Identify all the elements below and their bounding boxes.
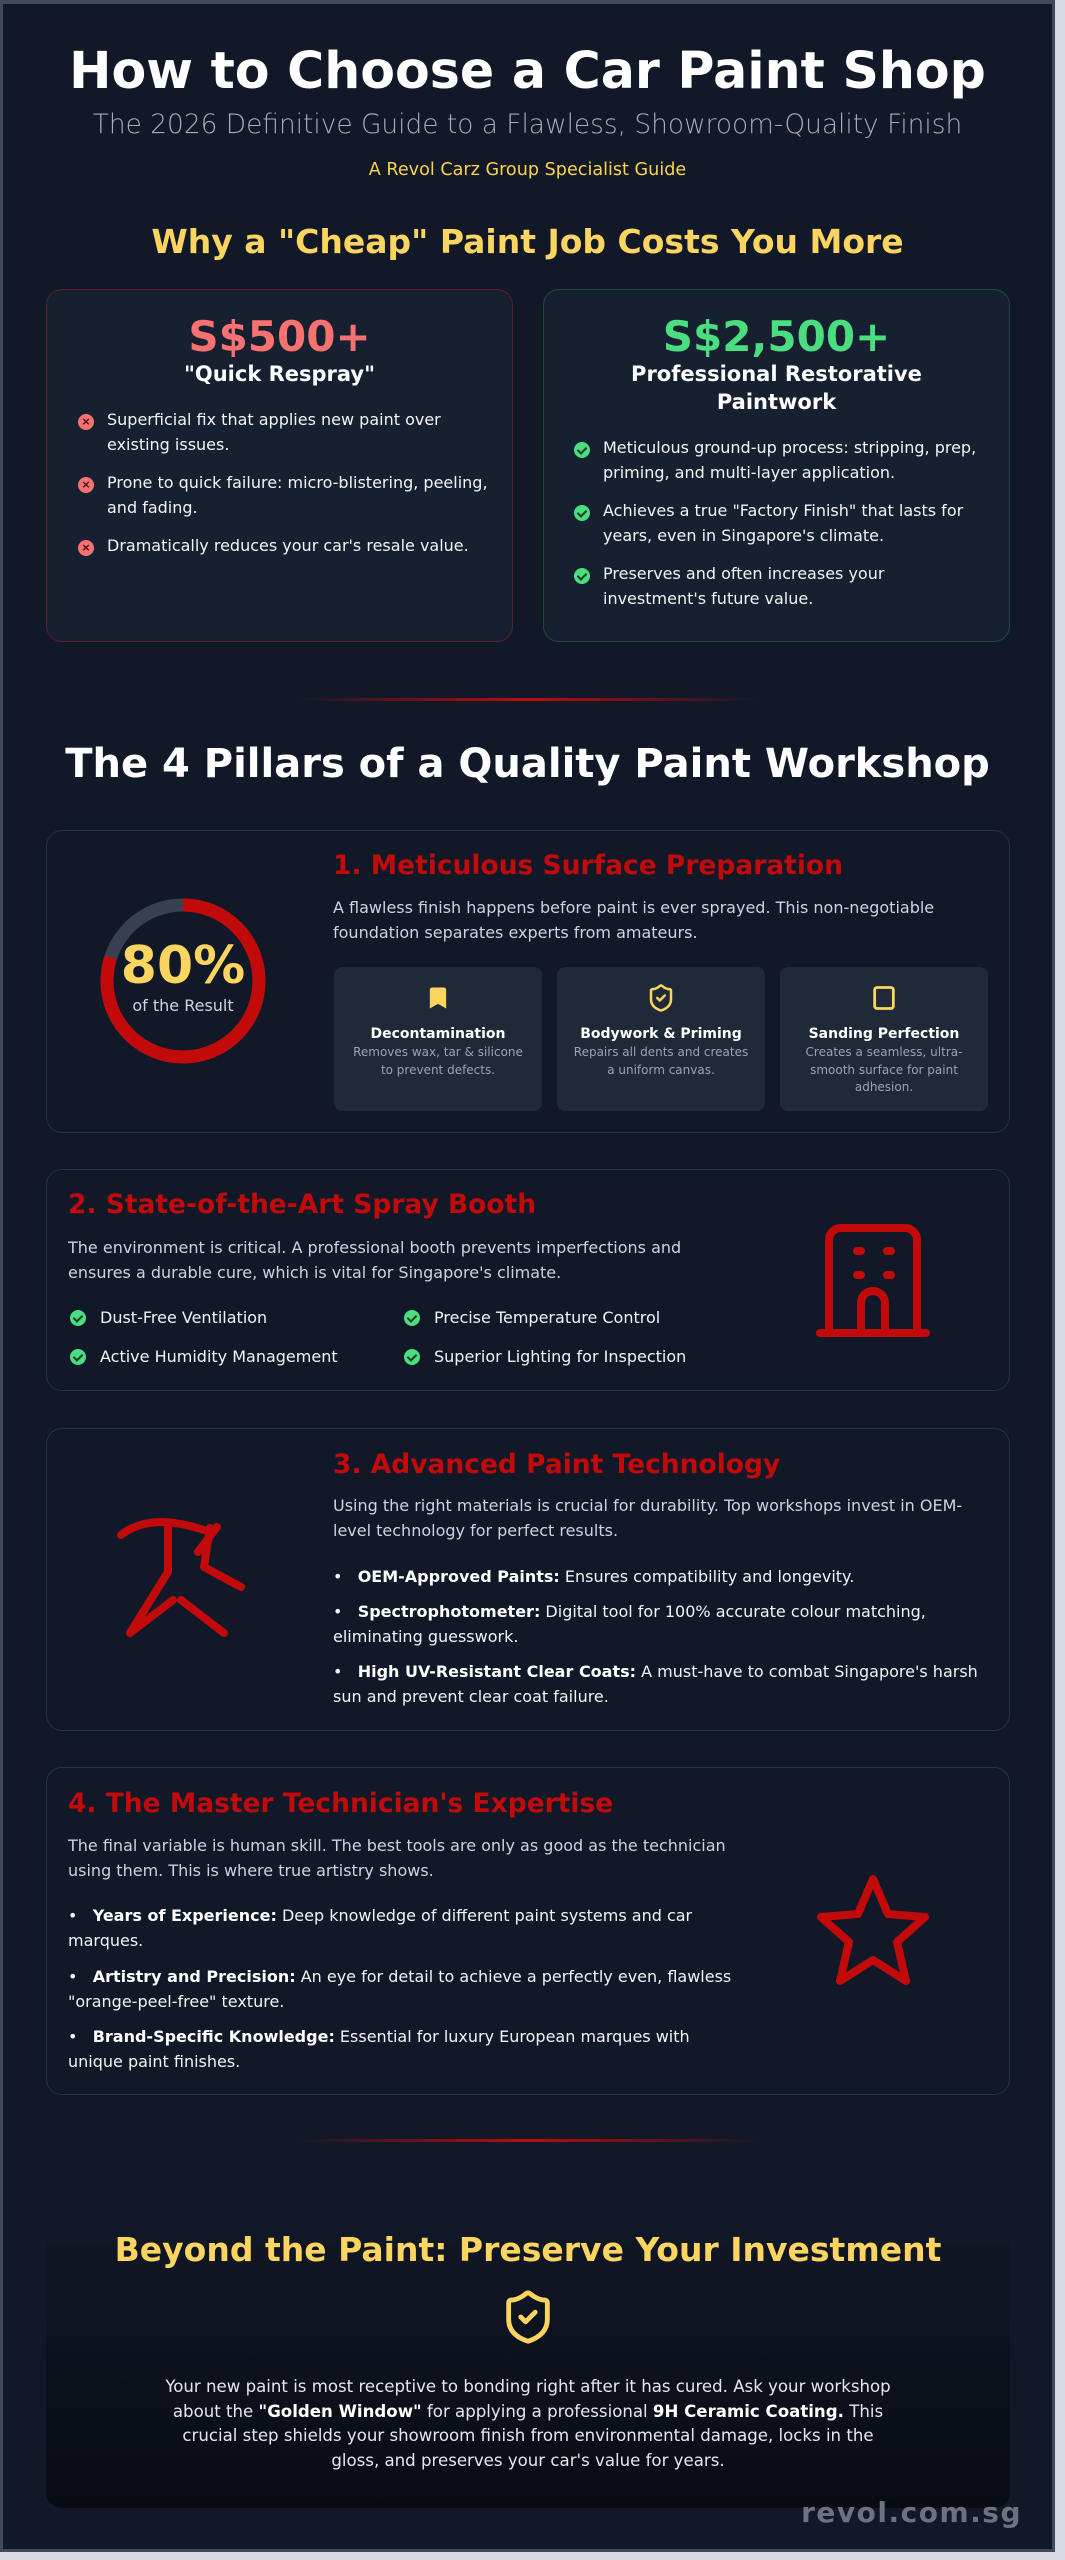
text: ceramic coating advice <box>165 2377 891 2470</box>
list: drawbacks: Superficial fix that applies new paint over existing issues. <box>107 410 441 454</box>
card: sanding perfection: Creates a seamless, ultra-smooth surface for paint adhesion. <box>806 1045 962 1094</box>
card: decontamination: Removes wax, tar & silicone to prevent defects. <box>353 1045 523 1076</box>
panel: pillar 1 surface preparation <box>46 830 1010 1133</box>
list: booth features: Superior Lighting for Inspection <box>434 1347 686 1366</box>
panel: pillar 2 spray booth <box>46 1169 1010 1391</box>
list: technology: • High UV-Resistant Clear Coats: A must-have to combat Singapore's harsh sun and prevent clear coat failure. <box>333 1662 978 1706</box>
list: benefits: investment's future value. <box>603 589 813 608</box>
section heading: cheap paint job: Why a "Cheap" Paint Job Costs You More <box>151 222 904 261</box>
icon: paint tool <box>117 1518 245 1638</box>
panel: pillar 4 technician expertise <box>46 1767 1010 2095</box>
card: sanding perfection: Sanding Perfection <box>809 1026 959 1042</box>
label: professional restorative paintwork <box>631 362 922 414</box>
card: bodywork & priming: Repairs all dents and creates a uniform canvas. <box>574 1045 748 1076</box>
panel: professional paintwork <box>543 289 1010 642</box>
card: decontamination: Decontamination <box>370 1026 506 1042</box>
heading: beyond the paint: Beyond the Paint: Preserve Your Investment <box>115 2230 941 2269</box>
icon: star <box>817 1875 929 1985</box>
text: ceramic coating advice: Your new paint is most receptive to bonding right after it has cured. Ask your workshop <box>165 2377 891 2396</box>
text: ceramic coating advice: crucial step shields your showroom finish from environmental damage, locks in the <box>182 2426 874 2445</box>
card: bodywork & priming: Bodywork & Priming <box>580 1026 742 1042</box>
list: booth features: Dust-Free Ventilation <box>100 1308 267 1327</box>
card: sanding perfection <box>780 967 988 1111</box>
chart: 80% donut <box>100 898 266 1064</box>
icon: shield check <box>506 2290 550 2344</box>
list: drawbacks: × <box>81 541 91 554</box>
heading: pillar 4: 4. The Master Technician's Expertise <box>68 1788 613 1819</box>
title: How to Choose a Car Paint Shop <box>69 41 986 100</box>
panel: beyond the paint <box>46 2213 1010 2508</box>
heading: pillar 3: 3. Advanced Paint Technology <box>333 1449 780 1480</box>
subtitle: The 2026 Definitive Guide to a Flawless, Showroom-Quality Finish <box>93 109 962 140</box>
text: pillar 2 intro: The environment is critical. A professional booth prevents imperfections and ensures a durable cure, which is vital for Singapore's climate. <box>68 1238 681 1282</box>
list: benefits: Achieves a true "Factory Finish" that lasts for years, even in Singapore's climate. <box>603 501 963 545</box>
icon: bookmark <box>430 988 446 1008</box>
stat label: of the Result <box>132 996 234 1015</box>
label: professional restorative paintwork: Paintwork <box>717 390 836 414</box>
icon: shield check <box>650 984 672 1012</box>
watermark: revol.com.sg: revol.com.sg <box>801 2496 1022 2529</box>
section heading: 4 pillars: The 4 Pillars of a Quality Paint Workshop <box>65 741 990 787</box>
card: bodywork & priming <box>557 967 765 1111</box>
list: technology <box>333 1567 978 1706</box>
stat: 80%: 80% <box>121 936 245 996</box>
list: drawbacks <box>78 410 488 556</box>
list: booth features: Precise Temperature Control <box>434 1308 660 1327</box>
label: professional restorative paintwork: Professional Restorative <box>631 362 922 386</box>
list: benefits <box>574 438 976 608</box>
list: technology: • Spectrophotometer: Digital tool for 100% accurate colour matching, eliminating guesswork. <box>333 1602 926 1646</box>
list: drawbacks: Dramatically reduces your car's resale value. <box>107 536 469 555</box>
text: pillar 1 intro: A flawless finish happens before paint is ever sprayed. This non-negotiable foundation separates experts from amateurs. <box>333 898 934 942</box>
list: drawbacks: Prone to quick failure: micro-blistering, peeling, and fading. <box>107 473 488 517</box>
list: expertise <box>68 1906 731 2071</box>
tagline: A Revol Carz Group Specialist Guide <box>369 160 686 180</box>
price: S$2,500+: S$2,500+ <box>663 312 890 361</box>
list: drawbacks: × <box>81 415 91 428</box>
list: expertise: • Years of Experience: Deep knowledge of different paint systems and car marques. <box>68 1906 692 1950</box>
card: decontamination <box>334 967 542 1111</box>
icon: square <box>873 986 895 1010</box>
text: ceramic coating advice: about the "Golden Window" for applying a professional 9H Ceramic Coating. This <box>173 2402 883 2420</box>
text: ceramic coating advice: gloss, and preserves your car's value for years. <box>331 2450 725 2470</box>
text: pillar 3 intro: Using the right materials is crucial for durability. Top workshops invest in OEM-level technology for perfect results. <box>333 1496 962 1540</box>
list: booth features <box>70 1308 686 1366</box>
label: quick respray: "Quick Respray" <box>184 362 375 386</box>
list: benefits: Preserves and often increases your <box>603 564 884 583</box>
heading: pillar 1: 1. Meticulous Surface Preparation <box>333 850 843 881</box>
list: technology: • OEM-Approved Paints: Ensures compatibility and longevity. <box>333 1567 854 1586</box>
heading: pillar 2: 2. State-of-the-Art Spray Booth <box>68 1189 536 1220</box>
panel: pillar 3 paint technology <box>46 1428 1010 1731</box>
list: expertise: • Brand-Specific Knowledge: Essential for luxury European marques with unique paint finishes. <box>68 2027 690 2071</box>
list: benefits: Meticulous ground-up process: stripping, prep, priming, and multi-layer application. <box>603 438 976 482</box>
list: drawbacks: × <box>81 478 91 491</box>
list: expertise: • Artistry and Precision: An eye for detail to achieve a perfectly even, flawless "orange-peel-free" texture. <box>68 1967 731 2011</box>
list: booth features: Active Humidity Management <box>100 1347 338 1366</box>
text: pillar 4 intro: The final variable is human skill. The best tools are only as good as the technician using them. This is where true artistry shows. <box>68 1836 726 1880</box>
price: S$500+: S$500+ <box>188 312 371 361</box>
panel: quick respray <box>46 289 513 642</box>
icon: building <box>816 1224 930 1337</box>
